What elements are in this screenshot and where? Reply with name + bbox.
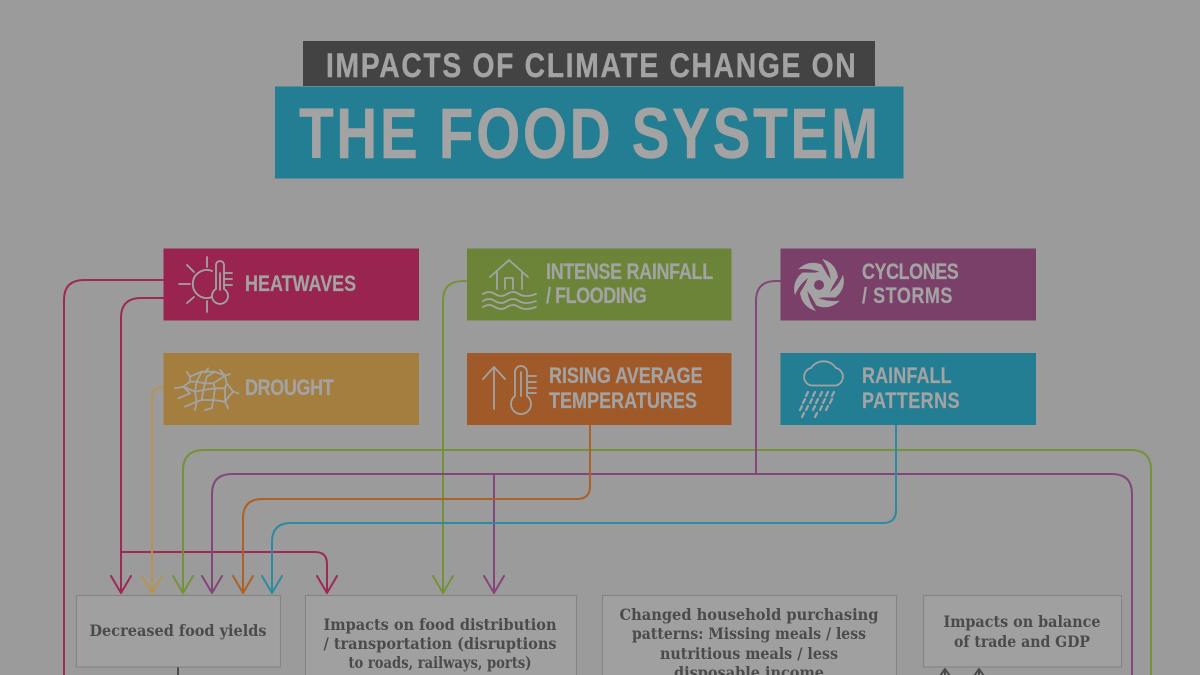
label: HEATWAVES: [245, 272, 356, 297]
icon: cyclone: [787, 256, 851, 314]
connector: rising temperatures: [233, 425, 590, 593]
label: / STORMS: [862, 284, 952, 309]
icon: up arrow and thermometer: [483, 366, 536, 414]
box: decreased food yields: Decreased food yields: [90, 621, 267, 640]
box: household purchasing patterns: [602, 596, 896, 675]
box: food distribution impacts: [306, 596, 576, 675]
connector: drought: [142, 387, 163, 593]
connector: cyclones: [202, 281, 1132, 675]
connector: lower links: [178, 668, 984, 675]
panel: cyclones / storms: [780, 248, 1036, 320]
label: PATTERNS: [862, 389, 960, 414]
label: RISING AVERAGE: [549, 364, 703, 389]
label: [862, 260, 959, 309]
connector: rainfall patterns: [262, 425, 896, 593]
box: food distribution impacts: to roads, railways, ports): [348, 653, 532, 672]
connector: flooding: [173, 281, 1151, 675]
label: [862, 364, 960, 414]
box: food distribution impacts: Impacts on food distribution: [324, 615, 556, 634]
panel: heatwaves: [164, 248, 419, 320]
label: INTENSE RAINFALL: [546, 260, 713, 285]
connector: heatwaves: [64, 280, 337, 675]
box: household purchasing patterns: Changed household purchasing: [620, 605, 879, 624]
panel: drought: [164, 353, 419, 425]
label: RAINFALL: [862, 364, 952, 389]
label: / FLOODING: [546, 284, 647, 309]
box: balance of trade and GDP: of trade and GDP: [954, 632, 1090, 651]
icon: sun and thermometer: [179, 257, 232, 312]
box: household purchasing patterns: nutritious meals / less: [660, 644, 838, 663]
box: balance of trade and GDP: [924, 596, 1122, 667]
box: household purchasing patterns: patterns: Missing meals / less: [632, 624, 866, 643]
icon: cracked earth: [175, 368, 238, 410]
icon: flooded house: [483, 260, 536, 309]
icon: rain cloud: [800, 361, 843, 417]
panel: intense rainfall / flooding: [467, 248, 732, 320]
panel: rising average temperatures: [467, 353, 732, 425]
label: [546, 260, 713, 309]
panel: rainfall patterns: [780, 353, 1036, 425]
label: TEMPERATURES: [549, 389, 697, 414]
title line 1: IMPACTS OF CLIMATE CHANGE ON: [326, 45, 856, 85]
label: CYCLONES: [862, 260, 959, 285]
label: [549, 364, 703, 414]
box: balance of trade and GDP: Impacts on balance: [944, 612, 1101, 631]
label: DROUGHT: [245, 376, 334, 401]
box: food distribution impacts: / transportation (disruptions: [324, 634, 557, 653]
title line 2: THE FOOD SYSTEM: [299, 94, 878, 173]
title: [275, 41, 904, 178]
box: decreased food yields: [76, 596, 280, 667]
